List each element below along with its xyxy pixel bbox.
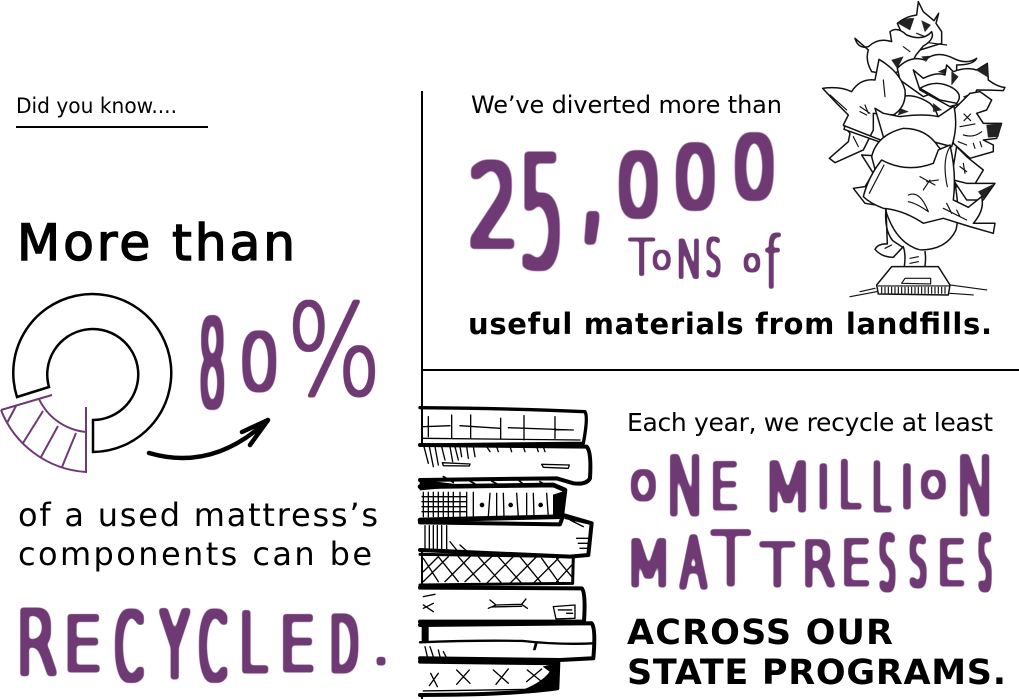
- heading: tons of: o: [743, 244, 761, 279]
- heading: recycled: R: [16, 593, 57, 695]
- icon: donut chart with purple recycled wedge removed: [1, 294, 171, 472]
- heading: mattresses: S: [910, 524, 926, 601]
- heading: mattresses: T: [712, 518, 750, 603]
- text: of a used mattress's components can be: components can be: [18, 535, 372, 573]
- vertical divider: [421, 91, 423, 699]
- figure: 25,000: 0: [674, 130, 717, 227]
- heading: recycled: C: [114, 594, 143, 699]
- heading: one million: I: [816, 454, 831, 521]
- heading: one million: [631, 441, 995, 534]
- mattress 4: [420, 515, 592, 557]
- figure: 80%: 0: [239, 318, 280, 408]
- text: of a used mattress's components can be: of a used mattress’s: [18, 496, 378, 534]
- heading: recycled: E: [63, 602, 102, 687]
- standing leg: [903, 247, 926, 275]
- mattress 2: [420, 445, 590, 484]
- heading: one million: N: [956, 441, 995, 534]
- heading: mattresses: T: [760, 533, 794, 600]
- heading: tons of: S: [706, 227, 721, 289]
- figure: 25,000: 0: [733, 120, 776, 217]
- panel: left column: [1, 94, 391, 699]
- heading: one million: E: [710, 451, 739, 523]
- mattress 1: [420, 408, 586, 445]
- mattress 6: [420, 588, 585, 622]
- figure: 25,000: 5: [520, 124, 564, 302]
- heading: one million: O: [921, 465, 946, 505]
- heading: tons of: [628, 222, 780, 305]
- illustration: stack of mattresses: [420, 408, 594, 695]
- heading: mattresses: S: [880, 521, 895, 608]
- text: across our state programs: STATE PROGRAMS.: [627, 653, 1006, 693]
- horizontal divider: [421, 369, 1019, 371]
- top elephants: [897, 2, 942, 50]
- heading: tons of: T: [628, 229, 655, 287]
- right elephants: [950, 147, 983, 187]
- underline: [16, 126, 208, 128]
- heading: mattresses: M: [625, 528, 672, 600]
- heading: recycled: E: [279, 602, 316, 688]
- heading: one million: L: [839, 450, 860, 523]
- text: each year, we recycle at least: Each year, we recycle at least: [627, 408, 993, 437]
- heading: mattresses: A: [680, 524, 706, 605]
- illustration: stack of elephants on a scale: [823, 2, 1005, 297]
- heading: recycled: L: [239, 597, 267, 690]
- text: did you know: Did you know....: [16, 94, 177, 119]
- heading: one million: I: [900, 454, 914, 521]
- scale: [877, 267, 950, 295]
- heading: recycled: [16, 592, 391, 699]
- figure: 80%: [199, 277, 382, 436]
- mattress 7: [420, 623, 594, 660]
- belly of lower elephants: [893, 96, 939, 137]
- arrow: [149, 420, 268, 458]
- front elephant: [863, 145, 995, 233]
- heading: one million: L: [872, 451, 890, 527]
- heading: tons of: O: [652, 246, 671, 275]
- heading: recycled: C: [199, 593, 227, 699]
- heading: tons of: N: [676, 229, 703, 291]
- panel: one million mattresses: [420, 408, 1006, 695]
- raised leg: [875, 208, 903, 257]
- heading: mattresses: S: [979, 519, 991, 607]
- figure: 80%: 8: [199, 297, 226, 436]
- heading: mattresses: E: [937, 528, 966, 599]
- heading: mattresses: [625, 518, 991, 608]
- heading: recycled: D: [330, 602, 358, 690]
- heading: tons of: f: [765, 222, 780, 305]
- text: we've diverted more than: We’ve diverted more than: [471, 91, 782, 119]
- big left elephant: [853, 155, 890, 207]
- heading: more than: More than: [17, 214, 295, 272]
- figure: 80%: %: [286, 277, 382, 424]
- mattress 5: [420, 554, 573, 585]
- text: across our state programs: [627, 613, 1006, 693]
- figure: 25,000: 0: [617, 138, 660, 235]
- heading: recycled: Y: [161, 592, 188, 699]
- mattress 8: [420, 662, 558, 695]
- heading: mattresses: E: [841, 528, 871, 599]
- figure: 25,000: [469, 78, 776, 302]
- heading: recycled: .: [372, 608, 391, 678]
- text: of a used mattress's components can be: [18, 496, 378, 573]
- heading: one million: O: [631, 466, 656, 509]
- heading: one million: N: [666, 441, 705, 534]
- panel: tons diverted: [468, 2, 1005, 341]
- mattress 3: [420, 485, 565, 520]
- text: across our state programs: ACROSS OUR: [627, 613, 893, 653]
- text: useful materials from landfills: useful materials from landfills.: [468, 307, 992, 341]
- figure: 25,000: ,: [577, 78, 609, 261]
- heading: mattresses: R: [802, 529, 835, 600]
- round body: [872, 128, 958, 250]
- heading: one million: M: [763, 449, 813, 526]
- figure: 25,000: 2: [469, 142, 518, 273]
